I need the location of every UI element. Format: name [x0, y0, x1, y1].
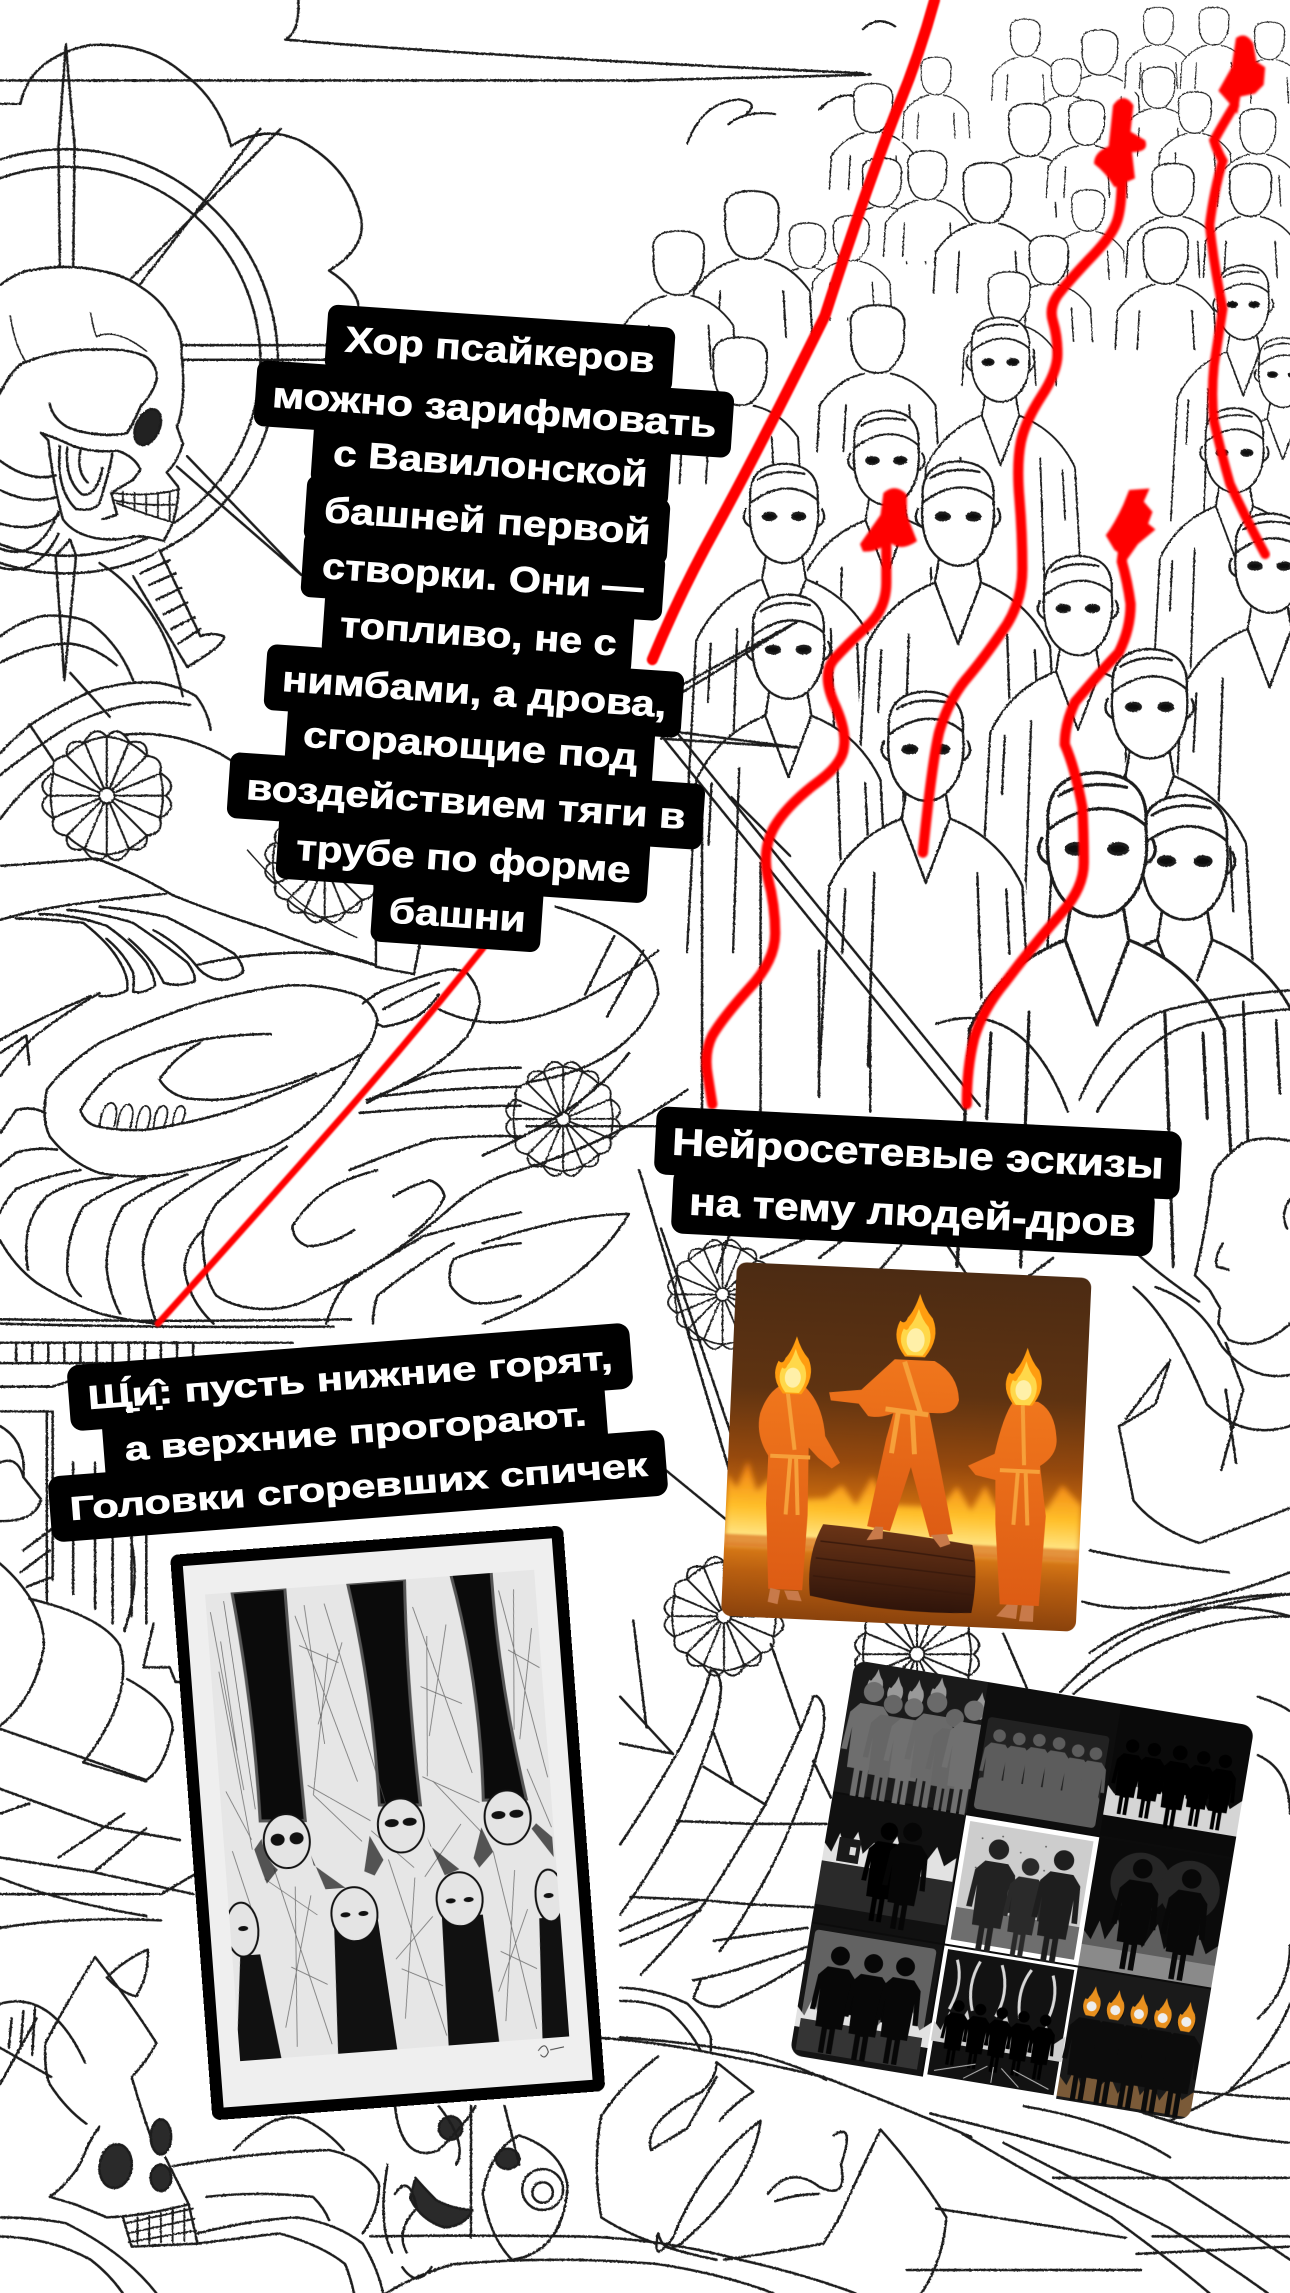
text block: psyker choir: сгорающие под: [302, 714, 639, 777]
sketch: lower halo arcs and shoulder wrap: [0, 563, 351, 863]
text block: burnt matches caption: Головки сгоревших спичек: [68, 1446, 649, 1527]
sketch: crowd faces: [681, 265, 1290, 1288]
sketch: bottom curls left: [0, 2117, 383, 2293]
text block: burnt matches caption: [47, 1322, 669, 1543]
scratches: [210, 1578, 566, 2051]
text block: psyker choir: топливо, не с: [339, 604, 618, 663]
text block: neural sketches caption: Нейросетевые эскизы: [671, 1122, 1165, 1187]
cell: halo figures: [1078, 1852, 1220, 1988]
cell: figures under white flames: [923, 1945, 1078, 2099]
cell: grey panel three dark figures: [794, 1930, 936, 2070]
frame: [170, 1525, 605, 2120]
text block: psyker choir: нимбами, а дрова,: [281, 658, 668, 725]
cell: figures with orange fire heads: [1055, 1967, 1213, 2121]
text block: psyker choir: створки. Они —: [321, 545, 645, 608]
sketch: fan of scallops down to the rail: [0, 1108, 240, 1324]
upright heads and inverted heads: [217, 1787, 566, 1958]
red arrow: straight line from crowd to lower left: [158, 0, 935, 1324]
sketch: right side arcs beside grid: [1170, 1697, 1290, 2121]
text block: psyker choir: Хор псайкеров: [344, 319, 656, 380]
text block: burnt matches caption: а верхние прогорают.: [123, 1395, 588, 1468]
drawing: [201, 1565, 575, 2067]
sketch: large curved halo lower right: [936, 990, 1290, 1112]
red wavy arrow 2: [923, 98, 1146, 853]
centre figure: [822, 1290, 964, 1548]
fire band: [724, 1460, 1083, 1560]
sketch: profile figure right: [1082, 1138, 1290, 1653]
sketch: sky lines and clouds: [0, 0, 870, 314]
red wavy arrow 4: [1210, 35, 1265, 554]
sketch: flowing bands bottom right: [907, 2077, 1290, 2293]
artist signature: [538, 2044, 565, 2057]
text block: psyker choir: [226, 304, 735, 953]
picture: framed etching of burning match people: [170, 1525, 605, 2120]
cell: light panel with three figures: [944, 1815, 1099, 1970]
sketch: big bowl with small oval: [0, 907, 702, 1327]
red wavy arrow 1: [706, 488, 917, 1104]
cell: black figures on white fire: [1103, 1740, 1242, 1837]
text block: psyker choir: с Вавилонской: [332, 432, 649, 495]
sketch: robes left lower: [0, 1564, 249, 1928]
cell: small figures in dark: [970, 1701, 1110, 1828]
sketch: crowd back rows: [616, 7, 1290, 490]
text block: neural sketches caption: на тему людей-дров: [688, 1182, 1137, 1245]
left figure: [758, 1336, 840, 1604]
sketch: skull with spine: [0, 267, 224, 667]
upper black bars: [232, 1588, 305, 1825]
picture: nine-cell monochrome sketch grid: [790, 1660, 1256, 2121]
lower black bars: [228, 1953, 282, 2066]
sketch: spiral ornaments bottom centre: [383, 2106, 567, 2278]
sketch: long lines around pictures: [639, 1170, 1290, 1694]
red wavy arrow 3: [967, 489, 1155, 1104]
sketch: crescents between pictures: [620, 1621, 831, 2080]
sketch: large oval fold with little fingers: [44, 969, 521, 1176]
sketch: halo ring with spikes: [0, 44, 329, 680]
dark shading around heads: [254, 1817, 555, 1894]
sketch: bottom skull: [0, 1878, 197, 2247]
text block: neural sketches caption: [654, 1106, 1182, 1257]
log: [808, 1524, 978, 1614]
sketch: robe folds and fingers: [0, 850, 420, 1076]
sketch: chrysanthemum flowers: [42, 731, 979, 1716]
cell: grey figures: [834, 1662, 988, 1816]
picture: orange figures with burning heads on a log: [721, 1262, 1092, 1632]
text block: burnt matches caption: Щ̱́и̣̂: пусть нижние горят,: [86, 1338, 614, 1416]
sketch: claw shapes bottom middle: [370, 2037, 971, 2293]
text block: psyker choir: можно зарифмовать: [271, 374, 718, 445]
cell: couple before burning house: [814, 1800, 964, 1926]
sketch: balustrade and pillars left: [0, 1343, 293, 1682]
text block: psyker choir: воздействием тяги в: [245, 766, 687, 837]
text block: psyker choir: башней первой: [323, 489, 652, 552]
sketch: spears and diagonal poles: [657, 622, 980, 1112]
eyes: [231, 1807, 555, 1931]
text block: psyker choir: трубе по форме: [295, 827, 632, 890]
text block: psyker choir: башни: [388, 889, 527, 940]
right figure: [968, 1348, 1057, 1622]
